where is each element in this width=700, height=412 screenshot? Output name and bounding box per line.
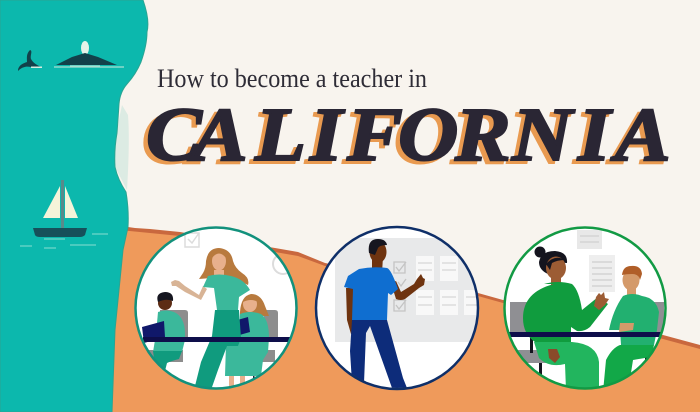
pale shoreline wash [115,105,129,190]
orange land [100,226,700,412]
left student [142,292,188,375]
icon: sailboat [20,180,108,248]
icon: faint ring [272,256,288,275]
whiteboard [335,238,485,342]
title: California: CALIFORNIA [146,93,671,177]
neck and head [372,260,383,268]
chairs [510,302,527,332]
icon: whale with spout [54,41,124,67]
ocean [0,0,148,412]
panel: teacher at board [315,226,485,390]
right person [603,266,659,392]
board notes [416,256,482,315]
icon: board checkboxes [394,262,406,311]
table [509,332,661,337]
left arm [346,288,353,334]
title line: How to become a teacher in [157,64,427,93]
table [143,337,291,342]
panel: teacher with students [135,227,297,390]
right student [225,294,278,390]
left person [523,246,609,390]
faint documents [577,230,602,249]
navy trousers [350,320,407,388]
panel: two people talking [504,227,666,392]
teacher [171,248,250,390]
icon: whale tail [18,50,42,71]
title: California: CALIFORNIA [142,96,666,180]
blue shirt [344,267,398,320]
icon: faint checkbox [185,233,199,247]
right arm [391,274,425,300]
